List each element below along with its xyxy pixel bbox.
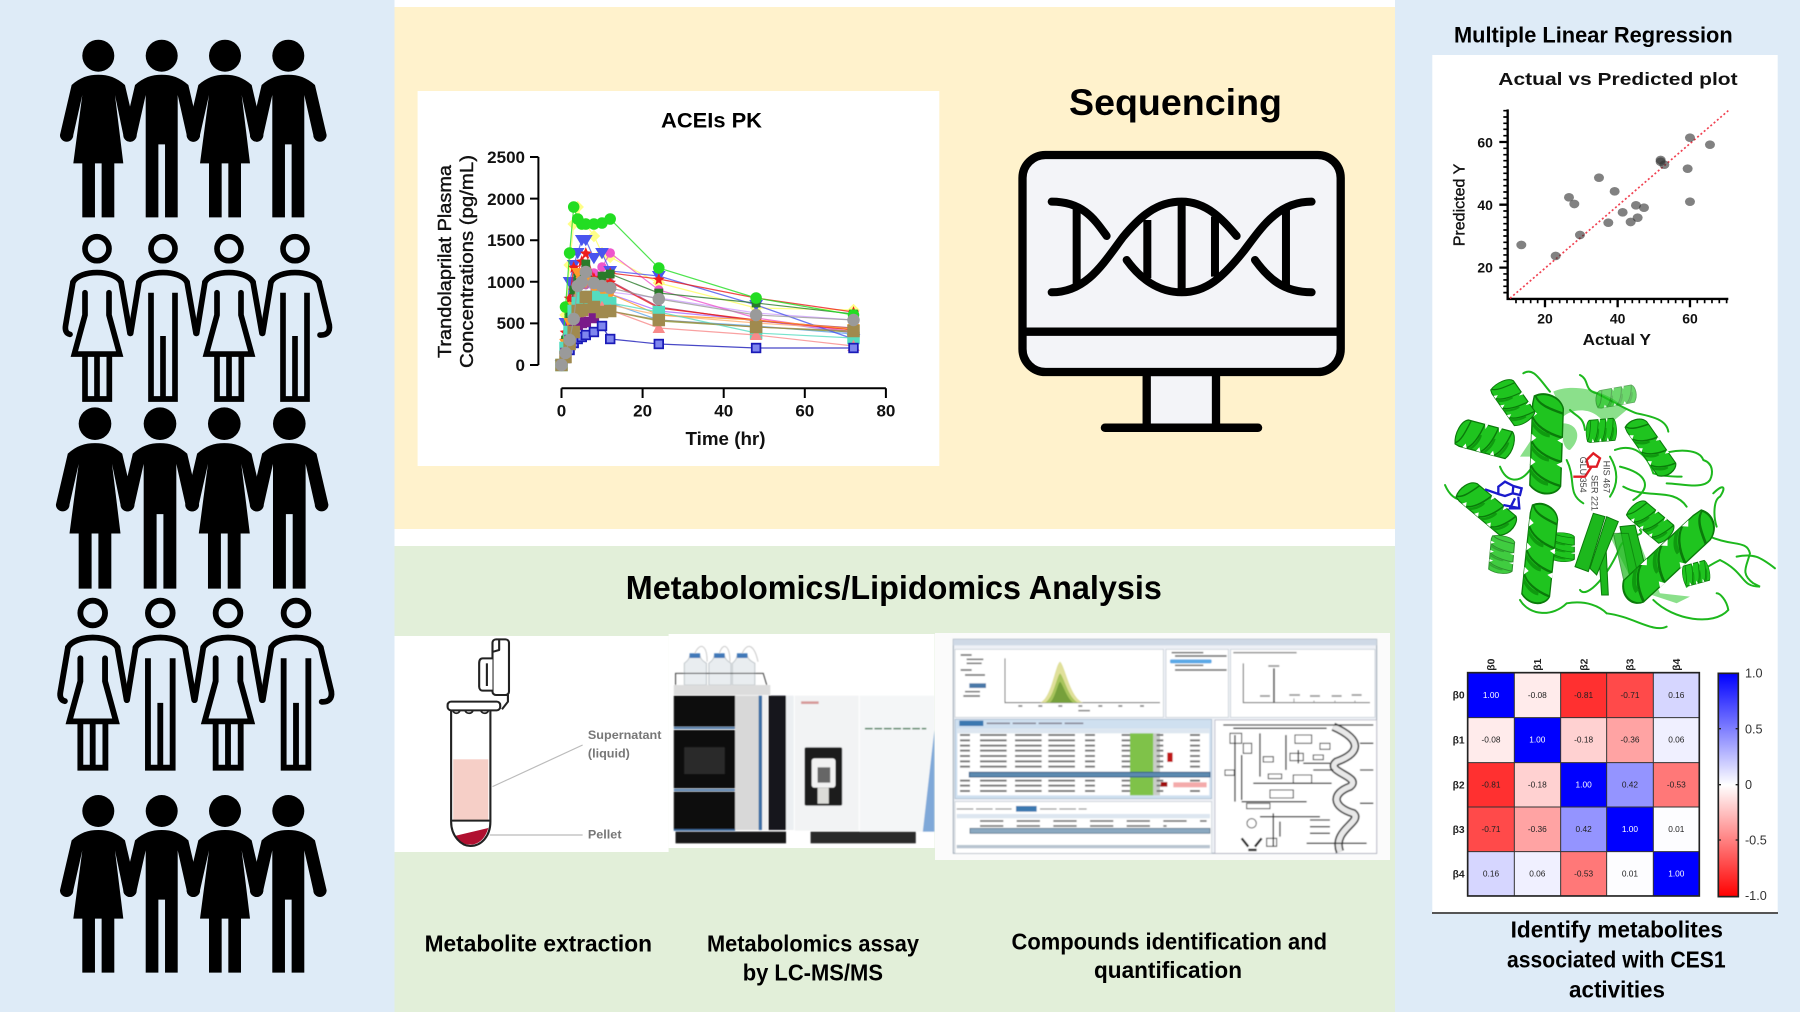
chart: actual vs predicted scatter plot — [1451, 69, 1738, 349]
y axis: 1000 — [487, 273, 525, 292]
row and column labels: β1 — [1533, 658, 1544, 671]
y axis: Trandolaprilat Plasma — [434, 164, 455, 358]
residue label: SER 221: SER 221 — [1590, 475, 1600, 511]
y axis: 2500 — [487, 148, 525, 167]
heatmap values: 0.06 — [1668, 735, 1685, 745]
tick labels: 20 — [1477, 260, 1493, 276]
colour scale legend: -1.0 — [1745, 889, 1767, 903]
heatmap values: -0.18 — [1574, 735, 1594, 745]
heatmap values: -0.18 — [1528, 779, 1547, 789]
caption: Compounds identification and quantification: quantification — [1094, 957, 1242, 983]
axis title: Actual Y: Actual Y — [1583, 332, 1651, 349]
colour scale legend: 0 — [1745, 778, 1752, 792]
x axis — [557, 388, 895, 449]
heatmap values: 0.42 — [1622, 779, 1638, 789]
heading: Sequencing: Sequencing — [1069, 82, 1282, 123]
y axis: 0 — [516, 356, 525, 375]
heatmap values — [1482, 690, 1686, 878]
protein loops — [1445, 372, 1775, 628]
icon row: solid people 5 — [60, 795, 327, 973]
tick labels: 60 — [1477, 134, 1493, 150]
callout: supernatant leader — [492, 745, 583, 787]
heatmap values: 0.01 — [1622, 868, 1638, 878]
heatmap cells — [1468, 673, 1699, 896]
row and column labels: β4 — [1453, 869, 1465, 880]
x axis: 60 — [795, 402, 814, 421]
callout: pellet leader — [490, 833, 583, 837]
tree panel — [1166, 649, 1228, 717]
image: metabolite extraction tube — [394, 636, 669, 852]
residue: red active site — [1573, 453, 1600, 477]
row and column labels: β3 — [1626, 658, 1637, 671]
icon: tube body — [448, 702, 500, 846]
heatmap values: -0.71 — [1620, 690, 1640, 700]
heatmap values: 0.01 — [1668, 824, 1685, 834]
row and column labels: β3 — [1453, 825, 1465, 836]
scatter points — [1516, 133, 1715, 260]
heatmap values: -0.36 — [1528, 824, 1547, 834]
panel: Metabolomics/Lipidomics Analysis — [394, 546, 1395, 1012]
heatmap values: 0.16 — [1483, 868, 1499, 878]
heading: Metabolomics/Lipidomics Analysis: Metabolomics/Lipidomics Analysis — [626, 569, 1162, 606]
tick labels — [1477, 134, 1698, 326]
chart title: Actual vs Predicted plot — [1498, 69, 1738, 89]
caption: Identify metabolites associated with CES1 activities: Identify metabolites — [1511, 916, 1723, 942]
icon: tube cap — [479, 639, 509, 709]
heatmap values: 1.00 — [1622, 824, 1638, 834]
icon row: outlined people 4 — [60, 601, 331, 768]
protein backdrop sheets — [1520, 388, 1690, 603]
chart title: ACEIs PK — [661, 110, 762, 133]
image: LC-MS/MS instrument — [669, 634, 935, 848]
tick labels: 20 — [1537, 310, 1553, 326]
caption: Compounds identification and quantification: Compounds identification and — [1012, 928, 1327, 954]
compounds table — [955, 719, 1212, 799]
heatmap values: 0.16 — [1668, 690, 1685, 700]
bottles on instrument — [676, 646, 767, 685]
identity line — [1510, 111, 1728, 298]
x axis: 40 — [714, 402, 733, 421]
heatmap values: -0.81 — [1482, 779, 1501, 789]
data series: subject concentration curves — [562, 207, 854, 365]
heatmap values: -0.53 — [1667, 779, 1686, 789]
label: Supernatant (liquid): Supernatant — [588, 728, 661, 742]
pathway table — [955, 802, 1212, 853]
x axis: 80 — [876, 402, 895, 421]
KEGG pathway diagram — [1215, 720, 1377, 853]
icon: computer monitor with DNA helix — [1022, 155, 1341, 428]
colour scale legend: -0.5 — [1745, 833, 1767, 847]
colour scale legend — [1718, 666, 1767, 903]
caption: Identify metabolites associated with CES1 activities: associated with CES1 — [1507, 947, 1726, 973]
x axis: 0 — [557, 402, 566, 421]
colour scale legend: 0.5 — [1745, 722, 1763, 736]
image: CES1 protein ribbon structure — [1445, 372, 1775, 628]
icon row: solid people 3 — [56, 407, 328, 589]
y axis: 500 — [497, 314, 525, 333]
heatmap values: 1.00 — [1576, 779, 1592, 789]
heatmap values: 1.00 — [1668, 868, 1685, 878]
y axis — [434, 148, 538, 375]
tick labels: 60 — [1682, 310, 1698, 326]
row and column labels: β2 — [1453, 780, 1465, 791]
chart: correlation heatmap — [1453, 658, 1767, 903]
row and column labels — [1453, 658, 1683, 880]
panel: study cohort of people icons — [0, 0, 394, 1012]
chart: ACEIs PK line chart — [418, 91, 939, 466]
heatmap values: -0.53 — [1574, 868, 1594, 878]
icon: DNA double helix — [1052, 202, 1312, 292]
heatmap values: -0.71 — [1482, 824, 1501, 834]
caption: Identify metabolites associated with CES1 activities: activities — [1569, 977, 1665, 1003]
row and column labels: β1 — [1453, 736, 1465, 747]
heatmap values: -0.36 — [1620, 735, 1640, 745]
icon row: solid people 1 — [60, 40, 327, 217]
panel: pharmacokinetics and sequencing — [394, 7, 1395, 529]
x axis: 20 — [633, 402, 652, 421]
ligand: blue molecule — [1485, 482, 1522, 508]
heatmap values: -0.08 — [1528, 690, 1547, 700]
heatmap values: 1.00 — [1483, 690, 1499, 700]
axes with ticks — [1499, 109, 1728, 307]
icon row: outlined people 2 — [65, 237, 329, 399]
heatmap values: -0.08 — [1482, 735, 1501, 745]
caption: Metabolomics assay by LC-MS/MS: Metabolomics assay — [707, 931, 919, 957]
label: Supernatant (liquid): (liquid) — [588, 747, 630, 761]
tick labels: 40 — [1477, 197, 1493, 213]
y axis: Concentrations (pg/mL) — [456, 155, 477, 368]
image: compound identification software screenshot — [935, 633, 1390, 860]
panel: CES1 association analysis — [1395, 0, 1800, 1012]
label: Pellet: Pellet — [588, 828, 622, 842]
row and column labels: β0 — [1453, 691, 1465, 702]
y axis: 2000 — [487, 190, 525, 209]
row and column labels: β0 — [1487, 658, 1498, 671]
row and column labels: β4 — [1672, 658, 1683, 671]
tick labels: 40 — [1610, 310, 1626, 326]
colour scale legend: 1.0 — [1745, 666, 1763, 680]
row and column labels: β2 — [1579, 658, 1590, 671]
axis title: Predicted Y: Predicted Y — [1451, 164, 1468, 246]
protein helices — [1453, 375, 1712, 605]
residue label: GLU 354: GLU 354 — [1578, 457, 1588, 493]
heatmap values: -0.81 — [1574, 690, 1594, 700]
heading: Multiple Linear Regression: Multiple Linear Regression — [1454, 23, 1733, 48]
mass spectrum panel — [1231, 649, 1375, 717]
residue label: HIS 467: HIS 467 — [1601, 461, 1611, 493]
heatmap values: 0.06 — [1529, 868, 1546, 878]
chromatogram panel — [955, 649, 1163, 717]
caption: Metabolomics assay by LC-MS/MS: by LC-MS/MS — [743, 960, 883, 986]
y axis: 1500 — [487, 231, 525, 250]
heatmap values: 0.42 — [1576, 824, 1592, 834]
heatmap values: 1.00 — [1529, 735, 1546, 745]
x axis: Time (hr) — [686, 428, 766, 449]
caption: Metabolite extraction: Metabolite extraction — [425, 931, 652, 957]
protein beta sheets — [1575, 513, 1650, 595]
